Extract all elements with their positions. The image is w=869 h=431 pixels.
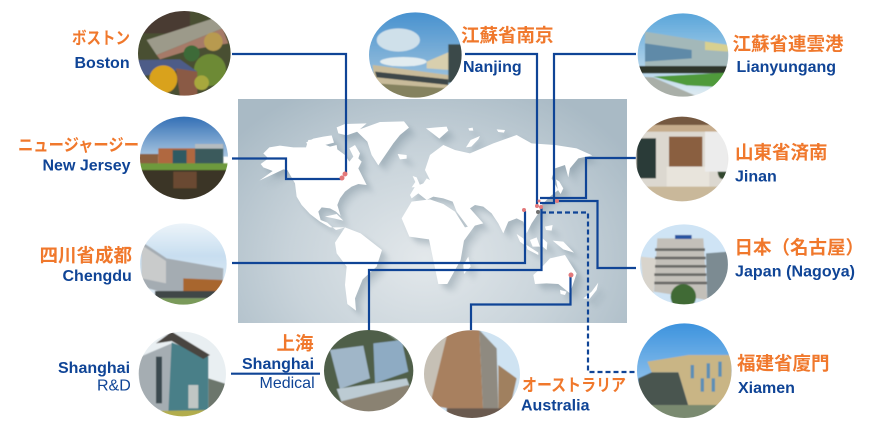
name: ボストン: ボストン [72,29,130,48]
panel: world map [238,99,627,323]
name: Nanjing: Nanjing [463,59,522,76]
name: 日本（名古屋）: 日本（名古屋） [734,237,864,258]
photo: Nanjing building [367,10,465,100]
photo: Xiamen building [635,322,733,420]
name: Shanghai: Shanghai [58,360,130,377]
location: Boston [72,10,233,97]
location: Japan [640,224,854,304]
connector lines [231,54,636,374]
location markers [340,172,574,278]
photo: Australia building [422,328,522,420]
name: 江蘇省南京: 江蘇省南京 [461,25,554,46]
photo: Boston building [137,10,233,97]
photo: Shanghai R&D building [137,330,228,418]
location: Xiamen [635,322,830,420]
photo: Nagoya building [640,224,728,304]
name: 四川省成都: 四川省成都 [40,245,133,266]
photo: Shanghai Medical building [324,330,414,412]
name: New Jersey: New Jersey [42,158,131,174]
photo: New Jersey building [138,115,230,202]
name: R&D: R&D [97,378,131,394]
name: Australia: Australia [521,398,590,414]
photo: Lianyungang building [635,12,732,98]
location: Shanghai R&D [58,330,228,418]
name: Jinan: Jinan [735,168,777,186]
name: Shanghai: Shanghai [242,356,314,373]
photo: Jinan lobby [633,115,732,203]
location: Nanjing [367,10,554,100]
name: Medical: Medical [260,375,315,392]
location: Lianyungang [635,12,844,98]
location: Shanghai Medical [242,328,417,415]
name: Chengdu: Chengdu [62,268,132,285]
name: 福建省廈門: 福建省廈門 [737,353,830,374]
name: オーストラリア: オーストラリア [522,376,626,395]
name: Xiamen: Xiamen [738,380,795,397]
name: Japan (Nagoya): Japan (Nagoya) [735,264,855,280]
name: Lianyungang: Lianyungang [736,59,836,76]
name: 江蘇省連雲港: 江蘇省連雲港 [732,34,844,54]
location: New Jersey [18,115,230,202]
location: Chengdu [40,222,228,307]
name: 山東省済南: 山東省済南 [735,142,828,163]
location: Jinan [633,115,828,203]
name: Boston: Boston [74,55,130,72]
location: Australia [422,328,626,420]
name: ニュージャージー: ニュージャージー [18,136,139,155]
photo: Chengdu building [138,222,228,307]
name: 上海: 上海 [276,333,314,354]
